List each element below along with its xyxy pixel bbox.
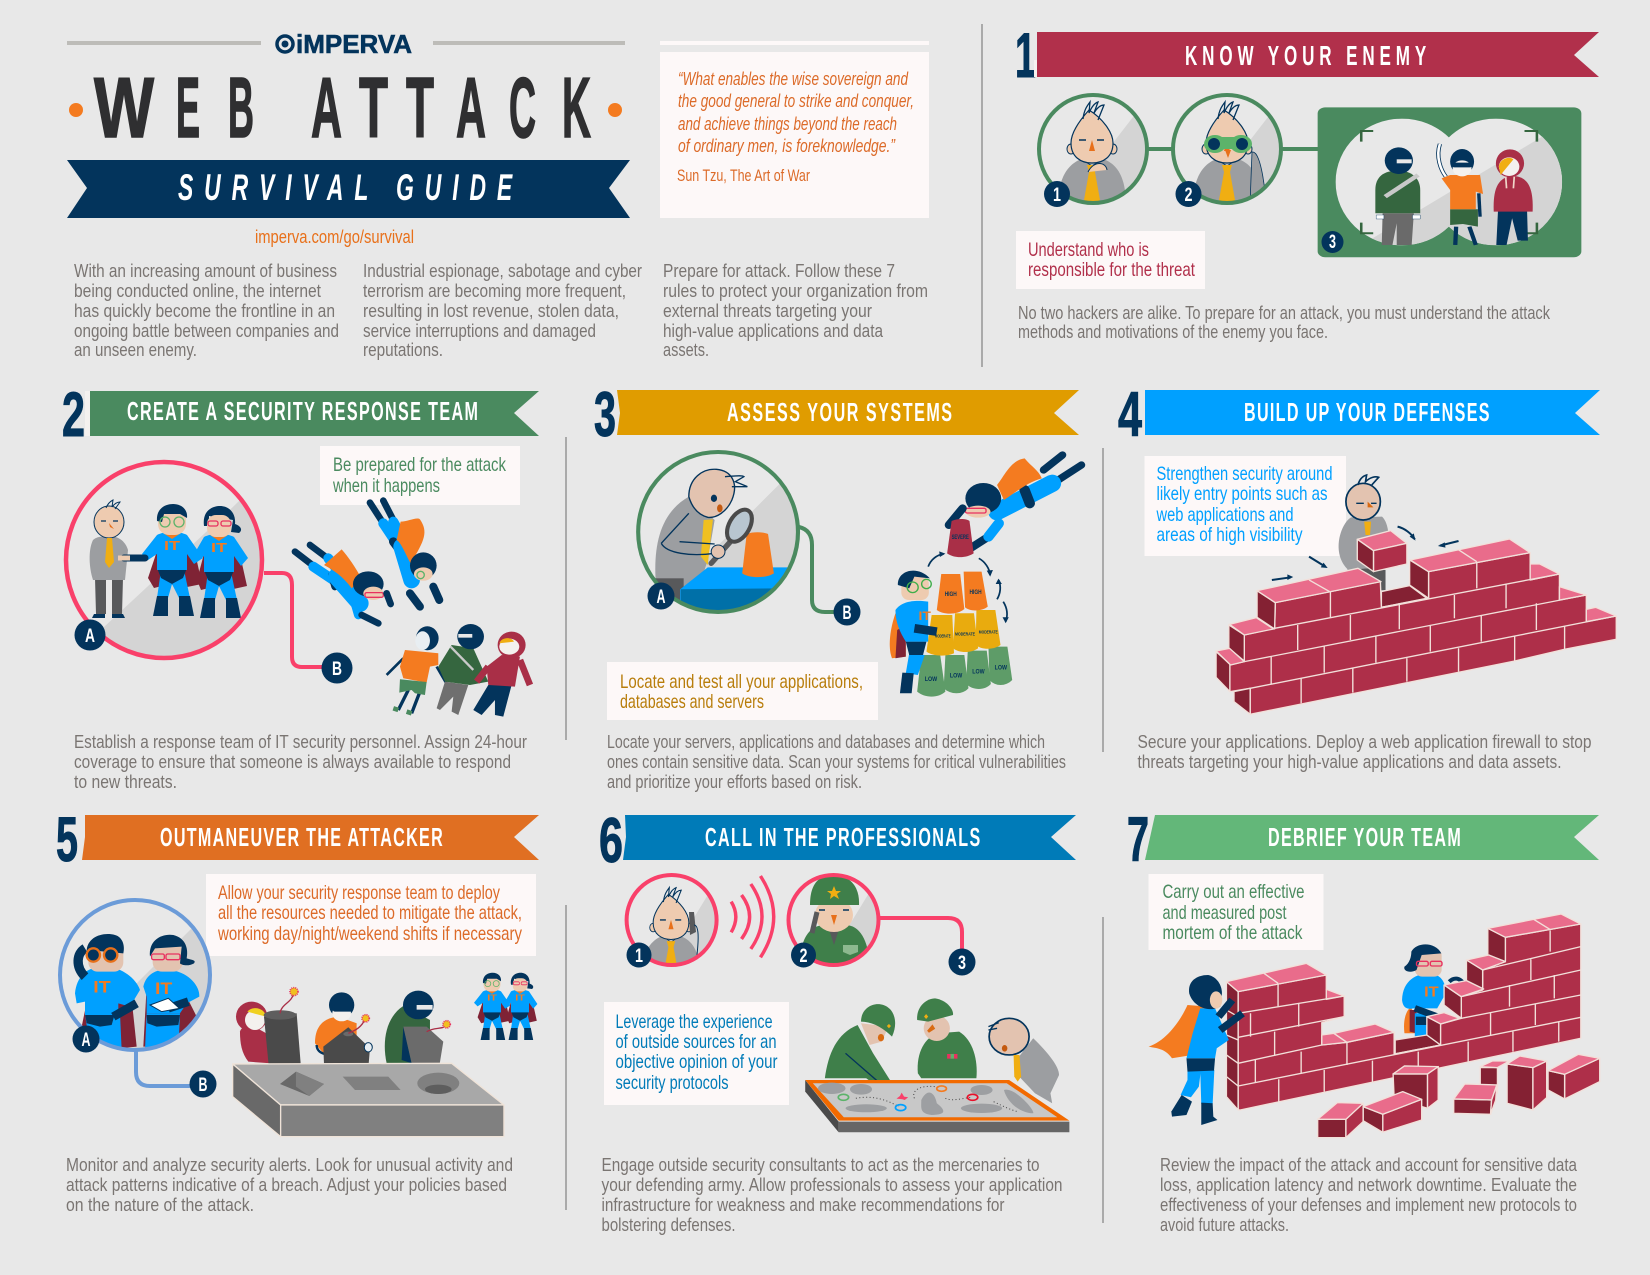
intro text columns: high-value applications and data xyxy=(663,320,884,341)
step 4 callout: Strengthen security around xyxy=(1156,463,1332,485)
step 6 text: bolstering defenses. xyxy=(602,1214,736,1235)
hero stacking cups: IT xyxy=(919,609,932,623)
moderate cups xyxy=(926,610,1000,656)
intro text columns: ongoing battle between companies and xyxy=(74,320,339,341)
panel: step 5 outmaneuver the attacker xyxy=(56,805,539,1215)
title: web attack: C xyxy=(509,61,536,156)
intro text columns xyxy=(74,260,928,360)
step 6 connector xyxy=(880,918,962,950)
step 1 callout: Understand who is xyxy=(1028,239,1149,261)
step 6 callout: objective opinion of your xyxy=(616,1051,778,1073)
step 3 text: and prioritize your efforts based on risk. xyxy=(607,771,862,792)
quote box: of ordinary men, is foreknowledge.” xyxy=(678,135,896,156)
sunglasses attacker xyxy=(315,992,357,1055)
intro text columns: Industrial espionage, sabotage and cyber xyxy=(363,260,642,281)
step 3 badges: A xyxy=(656,587,666,608)
panel: step 4 build up your defenses xyxy=(1118,380,1616,772)
step 5 heading xyxy=(56,805,539,875)
moderate cups: MODERATE xyxy=(935,634,951,640)
step 5 text: on the nature of the attack. xyxy=(66,1194,254,1215)
step 3 connector xyxy=(799,527,835,612)
step 6 text: your defending army. Allow professionals to assess your application xyxy=(602,1174,1062,1195)
step 3 callout xyxy=(607,662,878,720)
falling hackers xyxy=(387,624,530,717)
quote box xyxy=(660,41,929,218)
step 6 illustration: soldiers and man at the map table xyxy=(805,998,1069,1132)
step 6 callout: security protocols xyxy=(616,1072,729,1094)
step 5 callout: working day/night/weekend shifts if necessary xyxy=(217,923,522,945)
step 6 circle: soldier on the phone xyxy=(788,875,880,965)
url: imperva.com/go/survival xyxy=(255,227,414,247)
title: web attack: B xyxy=(228,61,254,156)
step 4 heading xyxy=(1118,380,1600,450)
column dividers xyxy=(566,24,1103,1223)
intro text columns: Prepare for attack. Follow these 7 xyxy=(663,260,895,281)
title: web attack: W xyxy=(94,61,155,156)
intro text columns: being conducted online, the internet xyxy=(74,280,321,301)
step 2 illustration: flying heroes and hackers xyxy=(295,501,530,717)
step 3 heading xyxy=(594,380,1079,450)
step 5 circle: team monitoring xyxy=(60,900,215,1050)
step 7 callout: and measured post xyxy=(1162,902,1287,924)
low cups: LOW xyxy=(950,673,962,680)
intro text columns: reputations. xyxy=(363,339,443,360)
hero girl on wall xyxy=(1402,944,1463,1037)
step 2 text: to new threats. xyxy=(74,771,177,792)
step 5 badges: A xyxy=(82,1030,91,1051)
brick wall xyxy=(1216,539,1616,714)
step 5 callout xyxy=(206,874,536,956)
low cups xyxy=(917,647,1012,697)
step 4 illustration: man building a brick wall xyxy=(1216,475,1616,714)
hero boy from behind xyxy=(1149,975,1243,1125)
sunglasses hacker xyxy=(1438,144,1483,245)
step 6 badges: 1 xyxy=(635,946,643,967)
step 2 text xyxy=(74,731,527,792)
triangular bomb xyxy=(323,1015,372,1068)
flying hero xyxy=(949,455,1081,550)
wall xyxy=(1226,914,1581,1110)
step 7 illustration: heroes inspecting a broken wall xyxy=(1149,914,1600,1138)
step 5 text: Monitor and analyze security alerts. Look for unusual activity and xyxy=(66,1154,513,1175)
step 4 callout xyxy=(1144,456,1346,556)
step 1 heading: KNOW YOUR ENEMY xyxy=(1185,40,1426,71)
step 5 callout: Allow your security response team to deploy xyxy=(218,882,500,904)
step 2 circle: team handshake xyxy=(66,462,262,680)
step 4 text: threats targeting your high-value applications and data assets. xyxy=(1138,751,1562,772)
panel: step 1 know your enemy xyxy=(1015,21,1599,342)
step 3 badges: B xyxy=(842,603,852,624)
step 6 callout xyxy=(604,1002,789,1105)
loose bricks xyxy=(1318,1054,1600,1138)
step 2 callout: Be prepared for the attack xyxy=(333,454,506,476)
title: web attack: A xyxy=(311,61,342,156)
step 1 callout xyxy=(1016,231,1205,289)
step 5 badges xyxy=(72,1026,216,1098)
hooded attacker xyxy=(236,1002,270,1063)
title: web attack: K xyxy=(562,61,591,156)
man holding brick xyxy=(1339,475,1389,593)
step 6 text: Engage outside security consultants to act as the mercenaries to xyxy=(602,1154,1040,1175)
step 5 illustration: attackers with bomb shapes over platform xyxy=(233,988,504,1137)
step 1 badges: 1 xyxy=(1053,185,1061,206)
step 3 callout: databases and servers xyxy=(620,691,764,713)
step 6 badges xyxy=(626,942,976,976)
quote box: Sun Tzu, The Art of War xyxy=(677,166,810,185)
intro text columns: resulting in lost revenue, stolen data, xyxy=(363,300,619,321)
subtitle banner: survival guide: SURVIVAL GUIDE xyxy=(178,166,513,208)
step 5 heading: OUTMANEUVER THE ATTACKER xyxy=(160,822,443,852)
soldier pointing xyxy=(825,1004,895,1089)
step 2 connector xyxy=(264,573,325,667)
step 5 callout: all the resources needed to mitigate the attack, xyxy=(218,902,522,924)
step 2 text: Establish a response team of IT security personnel. Assign 24-hour xyxy=(74,731,527,752)
step 5 circle: team monitoring: IT xyxy=(155,979,172,998)
step 2 heading xyxy=(62,380,539,450)
man leaning xyxy=(988,1018,1059,1103)
step 7 callout: mortem of the attack xyxy=(1162,922,1303,944)
step 1 text xyxy=(1018,302,1551,342)
step 3 text xyxy=(607,731,1066,792)
movement arrows xyxy=(1272,527,1459,580)
box bomb xyxy=(402,1021,450,1068)
step 1 circle: man thinking xyxy=(1039,95,1150,206)
step 2 callout xyxy=(320,446,520,505)
intro text columns: has quickly become the frontline in an xyxy=(74,300,335,321)
panel: step 2 create a security response team xyxy=(62,380,539,792)
step 6 badges: 2 xyxy=(800,946,808,967)
step 5 badges: B xyxy=(198,1075,208,1096)
step 5 circle: team monitoring: IT xyxy=(93,978,111,997)
masked hacker xyxy=(1375,147,1420,245)
step 5 heading: 5 xyxy=(56,805,78,875)
flying hero boy xyxy=(370,501,439,607)
step 4 callout: areas of high visibility xyxy=(1156,524,1303,546)
step 3 text: ones contain sensitive data. Scan your systems for critical vulnerabilities xyxy=(607,751,1066,772)
severe cup xyxy=(947,519,974,557)
panel: step 7 debrief your team xyxy=(1127,805,1600,1235)
severe cup: SEVERE xyxy=(952,534,969,541)
intro text columns: With an increasing amount of business xyxy=(74,260,337,281)
step 1 heading xyxy=(1015,21,1599,91)
high cups: HIGH xyxy=(970,589,982,596)
step 6 heading xyxy=(599,806,1076,876)
masked attacker xyxy=(385,991,434,1063)
step 1 badges xyxy=(1044,181,1344,253)
intro text columns: rules to protect your organization from xyxy=(663,280,928,301)
header rules and Imperva logo xyxy=(67,29,625,59)
step 6 callout: Leverage the experience xyxy=(616,1011,772,1033)
step 1 badges: 2 xyxy=(1184,185,1192,206)
step 1 connectors xyxy=(1148,147,1318,151)
step 1 callout: responsible for the threat xyxy=(1028,259,1195,281)
step 5 text xyxy=(66,1154,513,1215)
soldier thinking xyxy=(917,998,977,1078)
step 5 connector xyxy=(136,1050,195,1086)
step 7 callout: Carry out an effective xyxy=(1162,881,1304,903)
step 7 callout xyxy=(1148,874,1324,950)
header rules and Imperva logo: iMPERVA xyxy=(296,29,412,59)
panel: step 6 call in the professionals xyxy=(599,806,1076,1235)
step 2 heading: CREATE A SECURITY RESPONSE TEAM xyxy=(127,396,478,426)
intro text columns: external threats targeting your xyxy=(663,300,872,321)
step 3 heading: 3 xyxy=(594,380,616,450)
subtitle banner: survival guide xyxy=(67,160,630,218)
step 1 circle: man with binoculars xyxy=(1173,95,1285,206)
low cups: LOW xyxy=(995,664,1007,671)
step 2 badges: B xyxy=(332,659,342,680)
step 4 callout: web applications and xyxy=(1156,504,1294,526)
step 6 circle: man on the phone xyxy=(627,875,720,976)
title: web attack: A xyxy=(456,61,486,156)
title: web attack: E xyxy=(176,61,200,156)
step 1 badges: 3 xyxy=(1329,232,1336,253)
step 5 text: attack patterns indicative of a breach. Adjust your policies based xyxy=(66,1174,507,1195)
step 4 heading: 4 xyxy=(1118,380,1142,450)
step 3 text: Locate your servers, applications and databases and determine which xyxy=(607,731,1045,752)
title: web attack xyxy=(69,61,622,156)
low cups: LOW xyxy=(925,676,937,683)
step 7 text xyxy=(1160,1154,1578,1235)
flying hero girl xyxy=(295,545,391,623)
step 2 badges xyxy=(74,620,352,684)
step 5 small heroes xyxy=(474,973,537,1040)
quote box: the good general to strike and conquer, xyxy=(678,90,914,111)
step 2 callout: when it happens xyxy=(332,475,440,497)
intro text columns: an unseen enemy. xyxy=(74,339,197,360)
step 6 badges: 3 xyxy=(958,953,966,974)
low cups: LOW xyxy=(972,668,985,675)
title: web attack: T xyxy=(359,61,388,156)
step 4 heading: BUILD UP YOUR DEFENSES xyxy=(1244,397,1490,427)
step 2 heading: 2 xyxy=(62,380,85,450)
step 7 text: loss, application latency and network downtime. Evaluate the xyxy=(1160,1174,1577,1195)
step 3 circle: inspecting a cup xyxy=(638,452,804,613)
rotation arrows xyxy=(928,551,1009,623)
step 3 badges xyxy=(648,582,860,626)
held brick xyxy=(1357,531,1407,572)
intro text columns: service interruptions and damaged xyxy=(363,320,596,341)
step 7 heading: DEBRIEF YOUR TEAM xyxy=(1268,822,1461,852)
platform with shape holes xyxy=(233,1063,504,1137)
moderate cups: MODERATE xyxy=(955,632,975,638)
high cups xyxy=(937,572,988,614)
map table xyxy=(805,1080,1069,1132)
panel: step 3 assess your systems xyxy=(594,380,1081,792)
high cups: HIGH xyxy=(945,591,957,598)
step 6 text: infrastructure for weakness and make recommendations for xyxy=(602,1194,1004,1215)
step 4 callout: likely entry points such as xyxy=(1156,483,1328,505)
step 1 binocular view of hackers xyxy=(1318,107,1581,257)
step 6 callout: of outside sources for an xyxy=(616,1031,776,1053)
intro text columns: terrorism are becoming more frequent, xyxy=(363,280,626,301)
step 6 heading: 6 xyxy=(599,806,623,876)
step 3 heading: ASSESS YOUR SYSTEMS xyxy=(727,397,952,427)
step 7 heading: 7 xyxy=(1127,805,1149,875)
quote box: and achieve things beyond the reach xyxy=(678,113,897,134)
step 7 heading xyxy=(1127,805,1599,875)
step 3 illustration: risk cup pyramid xyxy=(890,455,1081,697)
title: web attack: T xyxy=(406,61,434,156)
step 3 callout: Locate and test all your applications, xyxy=(620,671,863,693)
hero girl on wall: IT xyxy=(1424,985,1439,1001)
step 2 badges: A xyxy=(85,626,95,647)
step 1 heading: 1 xyxy=(1015,21,1036,91)
step 6 heading: CALL IN THE PROFESSIONALS xyxy=(705,822,980,852)
moderate cups: MODERATE xyxy=(979,629,998,635)
step 1 text: methods and motivations of the enemy you face. xyxy=(1018,321,1328,342)
hooded hacker xyxy=(1494,149,1533,245)
step 6 text xyxy=(602,1154,1062,1235)
quote box: “What enables the wise sovereign and xyxy=(678,68,909,89)
step 4 text xyxy=(1138,731,1592,772)
cylinder bomb xyxy=(264,988,301,1068)
step 7 text: avoid future attacks. xyxy=(1160,1214,1289,1235)
step 6 signal waves xyxy=(731,876,774,957)
intro text columns: assets. xyxy=(663,339,709,360)
hero stacking cups xyxy=(890,571,937,693)
step 2 text: coverage to ensure that someone is always available to respond xyxy=(74,751,511,772)
